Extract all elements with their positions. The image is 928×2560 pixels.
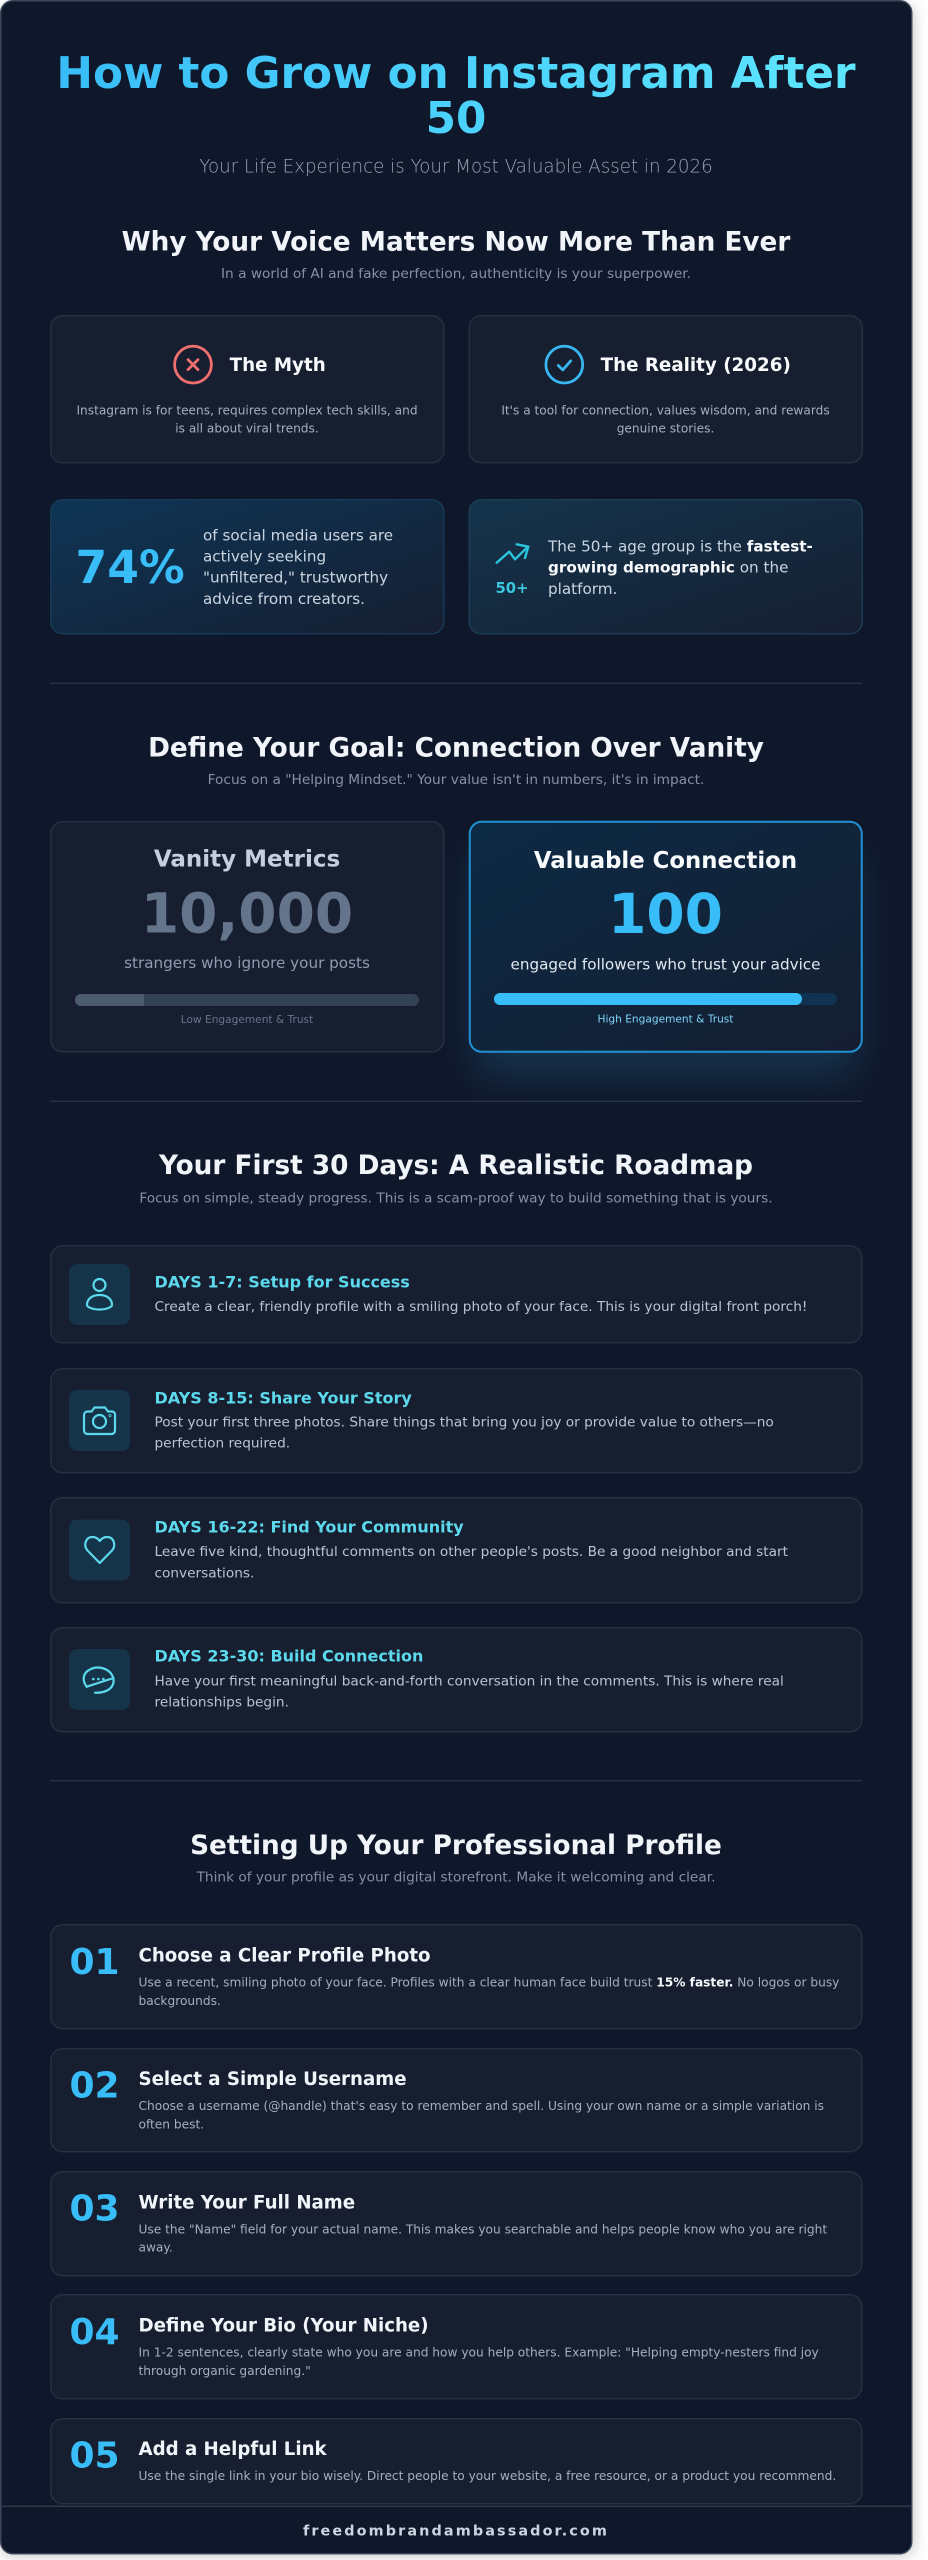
section heading: voice: In a world of AI and fake perfection, authenticity is your superpower.: [221, 266, 691, 282]
profile step 05: Add a Helpful Link: [138, 2439, 328, 2460]
roadmap step: days 1-7: Create a clear, friendly profile with a smiling photo of your face. This is your digital front porch!: [154, 1299, 807, 1315]
panel: 74 percent stat: [51, 500, 444, 634]
section heading: goal: Define Your Goal: Connection Over Vanity: [148, 734, 764, 764]
profile step 04: In 1-2 sentences, clearly state who you are and how you help others. Example: "Helping empty-nesters find joy: [138, 2346, 819, 2360]
panel: 50+ stat: The 50+ age group is the fastest-: [547, 538, 813, 556]
panel: 74 percent stat: of social media users are: [203, 527, 393, 545]
profile step 02: Choose a username (@handle) that's easy to remember and spell. Using your own name or a simple variation is: [138, 2099, 824, 2113]
bar: low engagement: [75, 994, 419, 1006]
roadmap step: days 16-22: conversations.: [154, 1565, 254, 1581]
profile step 03: 03: [70, 2189, 120, 2230]
profile step 03: away.: [138, 2241, 173, 2255]
icon: camera: [84, 1408, 115, 1434]
roadmap step: days 8-15: Post your first three photos. Share things that bring you joy or provide value to others—no: [154, 1415, 774, 1431]
profile step 01: 01: [70, 1942, 120, 1983]
roadmap step: days 16-22: [51, 1498, 862, 1603]
profile step 03: [51, 2172, 862, 2276]
profile step 05: 05: [70, 2435, 120, 2476]
profile step 02: 02: [70, 2066, 120, 2107]
footer: freedombrandambassador.com: [303, 2524, 609, 2540]
icon: check: [546, 346, 583, 383]
panel: valuable connection: engaged followers who trust your advice: [510, 955, 821, 973]
roadmap step: days 23-30: relationships begin.: [154, 1695, 289, 1711]
section heading: profile: Setting Up Your Professional Profile: [190, 1831, 722, 1861]
profile step 05: Use the single link in your bio wisely. Direct people to your website, a free resource, or a product you recommend.: [138, 2469, 836, 2483]
subtitle: Your Life Experience is Your Most Valuable Asset in 2026: [199, 156, 713, 178]
title: 50: [426, 93, 486, 144]
section heading: goal: Focus on a "Helping Mindset." Your value isn't in numbers, it's in impact.: [208, 772, 704, 788]
section heading: voice: [122, 228, 790, 282]
roadmap step: days 8-15: [51, 1369, 862, 1473]
profile step 04: [51, 2295, 862, 2399]
roadmap step: days 1-7: [51, 1246, 862, 1343]
panel: the reality: It's a tool for connection, values wisdom, and rewards: [501, 403, 830, 417]
title: How to Grow on Instagram After: [56, 48, 856, 99]
roadmap step: days 23-30: Have your first meaningful back-and-forth conversation in the comments. This is where real: [154, 1674, 784, 1690]
panel: vanity metrics: Vanity Metrics: [154, 847, 340, 873]
profile step 01: [51, 1925, 862, 2029]
panel: 74 percent stat: actively seeking: [203, 548, 326, 566]
roadmap step: days 8-15: perfection required.: [154, 1436, 290, 1452]
icon: heart: [85, 1537, 114, 1563]
panel: vanity metrics: [51, 822, 444, 1052]
panel: the reality: genuine stories.: [617, 422, 714, 436]
profile step 01: Use a recent, smiling photo of your face. Profiles with a clear human face build trust 15% faster. No logos or busy: [138, 1976, 839, 1990]
section heading: roadmap: Your First 30 Days: A Realistic Roadmap: [158, 1151, 753, 1181]
section heading: profile: [190, 1831, 722, 1886]
icon: cross: [175, 346, 211, 383]
profile step 05: [51, 2419, 862, 2504]
section heading: goal: [148, 734, 764, 788]
roadmap step: days 23-30: [51, 1628, 862, 1732]
panel: the myth: is all about viral trends.: [175, 422, 319, 436]
section heading: profile: Think of your profile as your digital storefront. Make it welcoming and clear.: [196, 1870, 715, 1886]
panel: vanity metrics: strangers who ignore your posts: [124, 954, 370, 972]
roadmap step: days 8-15: DAYS 8-15: Share Your Story: [154, 1388, 412, 1407]
panel: valuable connection: 100: [608, 882, 723, 946]
roadmap step: days 23-30: DAYS 23-30: Build Connection: [154, 1647, 423, 1666]
profile step 02: [51, 2049, 862, 2152]
panel: valuable connection glow: [475, 850, 857, 1076]
panel: valuable connection: Valuable Connection: [534, 848, 797, 874]
icon: chat bubble: [84, 1668, 114, 1693]
panel: the myth: The Myth: [230, 355, 326, 376]
panel: 74 percent stat: "unfiltered," trustworthy: [203, 569, 388, 587]
panel: 74 percent stat: 74%: [76, 541, 185, 594]
section heading: roadmap: [139, 1151, 773, 1207]
profile step 04: through organic gardening.": [138, 2364, 311, 2378]
panel: vanity metrics: Low Engagement & Trust: [181, 1014, 313, 1026]
panel: the myth: Instagram is for teens, requires complex tech skills, and: [76, 403, 418, 417]
panel: valuable connection: [470, 822, 862, 1052]
panel: the reality: The Reality (2026): [601, 355, 791, 376]
title: [56, 48, 856, 144]
panel: the reality: [469, 316, 862, 463]
panel: 74 percent stat: advice from creators.: [203, 590, 365, 608]
section heading: voice: Why Your Voice Matters Now More Than Ever: [122, 228, 790, 258]
panel: 50+ stat: platform.: [548, 580, 617, 598]
profile step 01: Choose a Clear Profile Photo: [138, 1946, 431, 1967]
profile step 04: Define Your Bio (Your Niche): [138, 2316, 429, 2337]
panel: 50+ stat: 50+: [496, 580, 528, 597]
section heading: roadmap: Focus on simple, steady progress. This is a scam-proof way to build something that is yours.: [139, 1191, 773, 1207]
roadmap step: days 16-22: DAYS 16-22: Find Your Community: [154, 1517, 464, 1536]
panel: 50+ stat: [469, 500, 862, 634]
roadmap step: days 1-7: DAYS 1-7: Setup for Success: [154, 1272, 410, 1291]
profile step 02: Select a Simple Username: [138, 2069, 407, 2090]
panel: the myth: [51, 316, 444, 463]
profile step 04: 04: [70, 2312, 120, 2353]
profile step 03: Write Your Full Name: [138, 2192, 355, 2213]
panel: vanity metrics: 10,000: [141, 882, 353, 946]
profile step 03: Use the "Name" field for your actual name. This makes you searchable and helps people know who you are right: [138, 2222, 827, 2236]
panel: valuable connection: High Engagement & Trust: [598, 1014, 733, 1026]
profile step 01: backgrounds.: [138, 1994, 221, 2008]
bar: high engagement: [494, 993, 837, 1005]
panel: 50+ stat: growing demographic on the: [548, 559, 788, 577]
roadmap step: days 16-22: Leave five kind, thoughtful comments on other people's posts. Be a good neighbor and start: [154, 1544, 789, 1560]
icon: person: [87, 1279, 112, 1310]
footer: [1, 2506, 911, 2553]
icon: trending up: [497, 544, 528, 563]
profile step 02: often best.: [138, 2117, 204, 2131]
